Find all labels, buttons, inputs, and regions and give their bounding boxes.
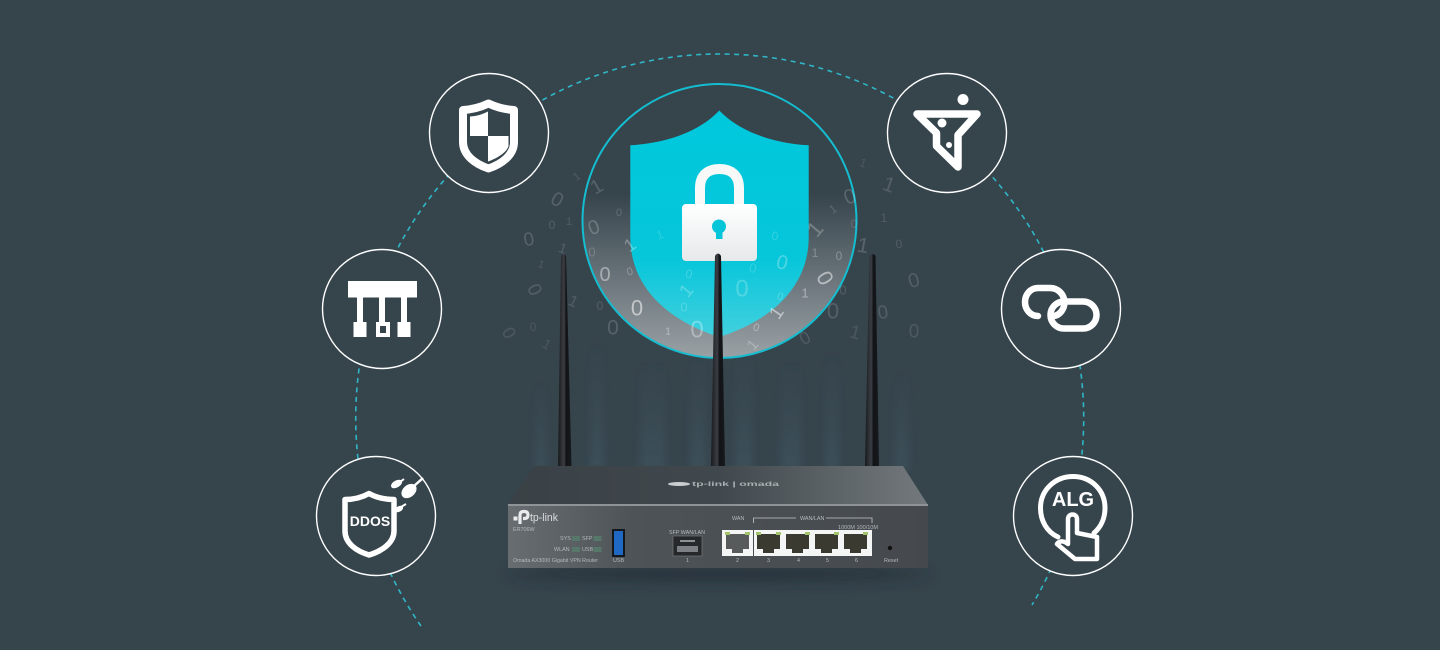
SFP port: 1 [686, 558, 689, 564]
binary digits: 1 [536, 258, 546, 272]
binary digits: 0 [841, 184, 859, 210]
icon: link chain [1002, 250, 1120, 368]
router [508, 254, 928, 568]
antenna left [558, 254, 572, 466]
binary digits: 0 [690, 316, 704, 344]
binary digits: 0 [751, 321, 761, 335]
binary digits: 0 [774, 251, 790, 275]
binary digits: 1 [571, 170, 583, 184]
binary digits: 0 [597, 299, 604, 313]
binary digits: 1 [566, 216, 572, 228]
binary digits: 1 [847, 321, 863, 345]
binary digits: 0 [585, 216, 603, 240]
USB port [612, 529, 625, 564]
dashed arc connecting icons [356, 54, 1084, 626]
binary digits: 1 [765, 303, 789, 323]
LED indicators: SFP [582, 536, 593, 542]
port labels: 6 [855, 558, 858, 564]
icon: filter funnel [888, 74, 1006, 192]
binary digits: 0 [549, 218, 556, 232]
binary digits: 0 [607, 316, 619, 340]
binary digits: 0 [796, 327, 814, 349]
padlock [682, 169, 757, 261]
icon: port grouping network [322, 250, 442, 368]
binary digits: 0 [811, 266, 839, 290]
binary digits: 0 [909, 322, 919, 342]
binary digits: 1 [587, 175, 607, 199]
binary digits: 1 [654, 227, 666, 243]
port labels [732, 516, 879, 564]
top logo [668, 482, 780, 488]
ethernet ports [722, 530, 872, 556]
central security badge [582, 84, 856, 358]
binary digits: 0 [522, 281, 546, 299]
port labels: WAN/LAN [800, 516, 824, 522]
binary digits: 1 [665, 326, 671, 338]
binary digits: 0 [851, 217, 858, 231]
binary digits: 1 [801, 286, 809, 300]
router top face [508, 466, 928, 505]
binary digits: 0 [625, 265, 635, 279]
LED indicators: SYS [560, 536, 571, 542]
binary digits: 0 [735, 276, 749, 302]
binary digits: 1 [857, 155, 869, 171]
LED indicators [554, 536, 602, 553]
binary digits: 0 [770, 229, 780, 244]
binary digits: 0 [530, 320, 537, 334]
USB port: USB [613, 558, 624, 564]
LED indicators: WLAN [554, 547, 570, 553]
binary digits: 1 [855, 234, 871, 258]
antenna right [865, 254, 879, 466]
binary digits: 0 [748, 260, 758, 276]
binary digits: 1 [540, 335, 555, 353]
glass circle [582, 84, 856, 358]
binary digits [498, 155, 922, 354]
binary digits: 0 [827, 298, 839, 324]
binary digits: 1 [744, 336, 762, 354]
product name: Omada AX3000 Gigabit VPN Router [513, 558, 598, 564]
binary digits: 1 [826, 201, 840, 217]
router shadow [506, 567, 930, 581]
binary digits: 0 [906, 269, 922, 293]
binary digits: 0 [631, 296, 643, 320]
badge ring [582, 84, 856, 358]
icon: DDOS shield: DDOS [350, 513, 390, 529]
port labels: 4 [797, 558, 800, 564]
model label: ER706W [513, 527, 535, 533]
binary digits: 1 [880, 172, 898, 198]
binary digits: 0 [839, 282, 847, 298]
port labels: 2 [736, 558, 739, 564]
binary digits: 0 [616, 207, 622, 219]
port labels: 5 [826, 558, 829, 564]
tp-link logo: tp-link [530, 512, 558, 524]
binary digits: 0 [684, 266, 694, 282]
router front face [508, 505, 928, 568]
binary digits: 1 [881, 211, 888, 225]
binary digits: 1 [565, 292, 581, 312]
port labels: 1000M 100/10M [838, 525, 879, 531]
binary digits: 0 [498, 324, 520, 342]
binary digits: 0 [547, 188, 567, 212]
binary digits: 1 [676, 280, 698, 302]
binary digits: 0 [522, 229, 536, 251]
binary digits: 0 [894, 236, 904, 251]
icon: ALG hand: ALG [1052, 489, 1094, 511]
cyan shield [630, 110, 809, 337]
icon: DDOS shield [316, 456, 436, 576]
binary digits: 0 [599, 264, 611, 286]
binary digits: 0 [588, 244, 596, 260]
binary digits: 0 [876, 302, 890, 324]
binary digits: 1 [620, 234, 640, 256]
icon: partial shield [430, 74, 548, 192]
front edge [508, 504, 928, 506]
antenna center [711, 254, 725, 466]
binary digits: 0 [775, 290, 785, 304]
reset button: Reset [884, 558, 899, 564]
light streaks behind router [535, 340, 909, 470]
icon: ALG hand [1014, 456, 1132, 576]
port labels: WAN [732, 516, 744, 522]
LED indicators: USB [582, 547, 593, 553]
tp-link logo [514, 512, 558, 524]
SFP port: SFP WAN/LAN [669, 530, 705, 536]
attack missiles [390, 478, 423, 513]
port labels: 3 [767, 558, 770, 564]
binary digits: 1 [812, 246, 819, 260]
binary digits: 1 [557, 239, 570, 257]
binary digits: 0 [836, 249, 843, 263]
reset button [884, 546, 899, 564]
SFP port [669, 530, 705, 564]
binary digits: 0 [680, 300, 688, 314]
top logo: tp-link | omada [692, 482, 780, 488]
binary digits: 1 [801, 216, 829, 242]
